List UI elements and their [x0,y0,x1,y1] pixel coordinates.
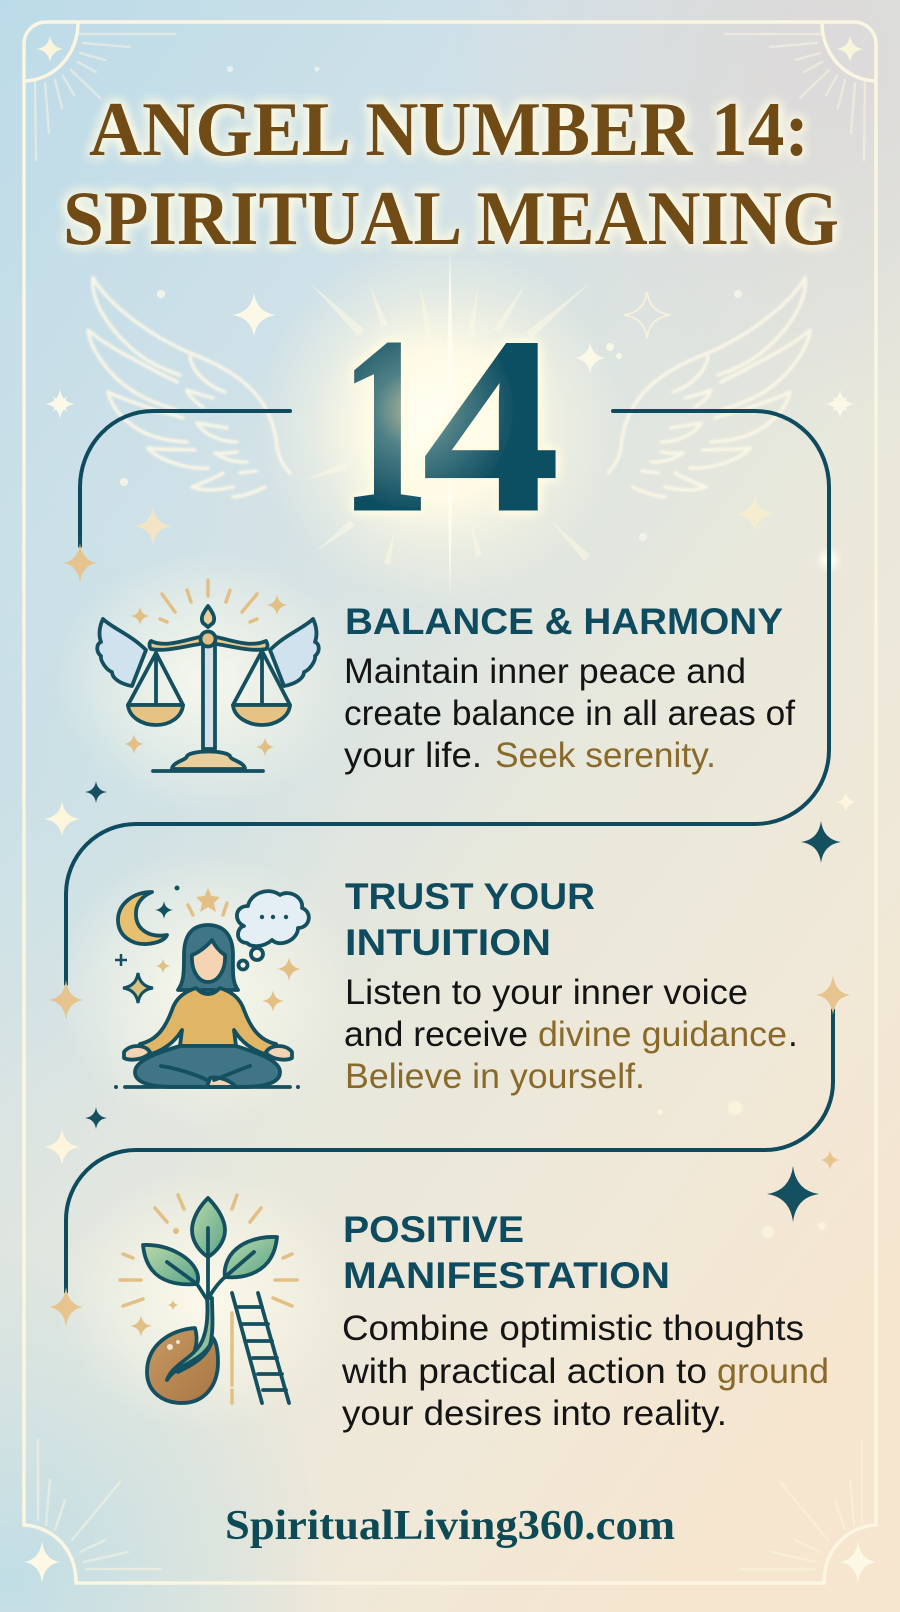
icon: sprouting seed and ladder [120,1195,297,1403]
angel wings backdrop [88,278,810,497]
body text [344,973,798,1096]
body text: Seek serenity. [495,736,716,775]
title: ANGEL NUMBER 14: [89,86,809,172]
body text: ground [717,1352,829,1391]
title: SPIRITUAL MEANING [63,175,839,261]
icon: meditating person [114,886,309,1089]
heading [345,876,595,963]
body text: Listen to your inner voice [345,973,748,1012]
body text: Maintain inner peace and [344,652,746,691]
body text: . [788,1015,798,1054]
big number 14: 4 [423,287,559,564]
body text: and receive [344,1015,528,1054]
section: positive manifestation [341,1209,829,1433]
icon: balance scales with wings [97,580,319,771]
heading: BALANCE & HARMONY [345,601,783,642]
sparkles [44,66,856,1238]
heading: TRUST YOUR [345,876,595,917]
body text: divine guidance [538,1015,787,1054]
body text [344,652,795,775]
body text: your life. [344,736,482,775]
heading: INTUITION [345,922,551,963]
connector lines [66,411,833,1292]
body text: with practical action to [341,1352,707,1391]
footer website: SpiritualLiving360.com [225,1503,675,1549]
body text: Believe in yourself. [345,1057,645,1096]
body text: your desires into reality. [342,1394,727,1433]
connector stars [49,543,850,1327]
section: trust your intuition [344,876,798,1096]
central light burst [255,240,625,610]
section: balance and harmony [344,601,795,775]
heading: POSITIVE [343,1209,524,1250]
big number 14 [341,287,559,564]
body text: Combine optimistic thoughts [342,1309,804,1348]
title [63,86,839,261]
heading: MANIFESTATION [343,1255,670,1296]
body text [341,1309,829,1433]
heading [343,1209,670,1296]
big number 14: 1 [341,287,429,564]
body text: create balance in all areas of [344,694,795,733]
